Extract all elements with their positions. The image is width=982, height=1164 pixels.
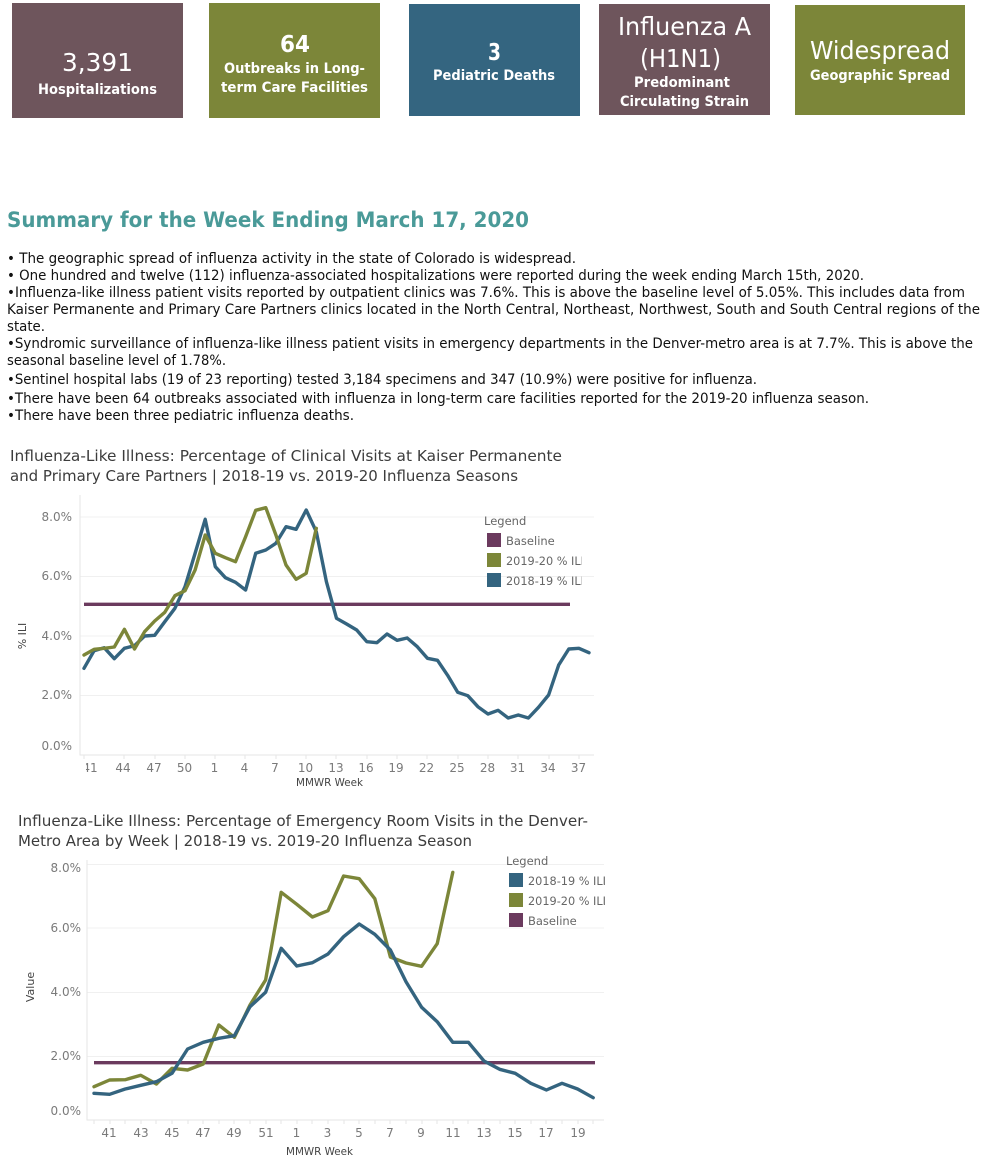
series: baseline: [84, 603, 570, 606]
text block: summary bullets: • The geographic spread of influenza activity in the state of Colorado is widespread.: [7, 251, 576, 267]
x axis labels: 51: [258, 1126, 274, 1140]
y axis labels: 4.0%: [42, 629, 72, 643]
x axis labels: 49: [226, 1126, 242, 1140]
stat card: predominant strain: Circulating Strain: [620, 94, 749, 110]
series: 2018-19: [94, 924, 593, 1098]
y axis labels: 6.0%: [50, 921, 81, 935]
x axis labels: 7: [271, 761, 279, 775]
y axis labels: 8.0%: [42, 510, 72, 524]
stat card: pediatric deaths: [409, 4, 580, 116]
chart title: clinical visits: [10, 447, 562, 485]
x axis labels: 45: [164, 1126, 180, 1140]
chart title: clinical visits: Influenza-Like Illness: Percentage of Clinical Visits at Kaiser Permanente: [10, 447, 562, 465]
series: 2019-20: [84, 508, 316, 655]
chart title: emergency visits: [18, 812, 588, 850]
stat card: outbreaks: term Care Facilities: [221, 80, 368, 96]
x axis labels: 37: [571, 761, 586, 775]
x axis title: MMWR Week: [286, 1145, 354, 1158]
x axis labels: 3: [324, 1126, 331, 1140]
x axis labels: 17: [538, 1126, 554, 1140]
stat card: pediatric deaths: 3: [488, 40, 501, 66]
x axis labels: 1: [293, 1126, 300, 1140]
stat card: hospitalizations: 3,391: [62, 48, 133, 77]
x axis labels: 15: [507, 1126, 523, 1140]
stat card: predominant strain: (H1N1): [640, 44, 721, 73]
stat card: predominant strain: Predominant: [634, 75, 730, 91]
stat card: hospitalizations: Hospitalizations: [38, 82, 157, 98]
x axis labels: 19: [388, 761, 404, 775]
legend: [506, 854, 606, 928]
stat card: predominant strain: [599, 4, 770, 115]
x axis labels: [101, 1126, 586, 1140]
stat card: geographic spread: [795, 5, 965, 115]
chart title: emergency visits: Metro Area by Week | 2018-19 vs. 2019-20 Influenza Season: [18, 832, 472, 850]
x axis labels: 44: [115, 761, 131, 775]
series: baseline: [94, 1061, 595, 1064]
x axis labels: 11: [445, 1126, 461, 1140]
y axis labels: [42, 510, 72, 753]
stat card: outbreaks: Outbreaks in Long-: [224, 61, 365, 77]
text block: summary bullets: state.: [7, 319, 45, 335]
legend: Baseline: [528, 914, 577, 928]
x axis labels: 1: [211, 761, 218, 775]
text block: summary bullets: •Sentinel hospital labs (19 of 23 reporting) tested 3,184 specimens and 347 (10.9%) were positive for influenza.: [7, 372, 757, 388]
stat card: predominant strain: Influenza A: [618, 12, 751, 41]
y axis labels: 8.0%: [50, 861, 81, 875]
legend: Legend: [506, 854, 548, 868]
y axis labels: 4.0%: [50, 985, 81, 999]
y axis title: % ILI: [16, 623, 29, 649]
y axis labels: 2.0%: [50, 1049, 81, 1063]
x axis labels: 28: [480, 761, 495, 775]
stat card: outbreaks: 64: [280, 32, 310, 58]
legend: [484, 514, 584, 588]
x axis title: MMWR Week: [296, 776, 364, 789]
y axis title: Value: [24, 972, 37, 1002]
series: 2018-19: [84, 510, 589, 718]
x axis labels: 13: [476, 1126, 492, 1140]
heading: summary: Summary for the Week Ending March 17, 2020: [7, 208, 529, 233]
legend: Baseline: [506, 534, 555, 548]
line chart: clinical visits: [16, 495, 594, 789]
stat card: outbreaks: [209, 3, 380, 118]
x axis labels: 5: [355, 1126, 363, 1140]
text block: summary bullets: •There have been 64 outbreaks associated with influenza in long-term care facilities reported for the 2019-20 influenza season.: [7, 391, 869, 407]
stat card: hospitalizations: [12, 3, 183, 118]
y axis labels: [50, 861, 81, 1118]
x axis labels: 47: [146, 761, 162, 775]
text block: summary bullets: • One hundred and twelve (112) influenza-associated hospitalizations were reported during the week ending March 15th, 2020.: [7, 268, 864, 284]
line chart: emergency visits: [24, 854, 606, 1158]
series: 2019-20: [94, 872, 453, 1087]
x axis labels: 43: [133, 1126, 149, 1140]
x axis labels: 41: [101, 1126, 117, 1140]
stat card: geographic spread: Geographic Spread: [810, 68, 950, 84]
x axis labels: 16: [358, 761, 374, 775]
y axis labels: 6.0%: [42, 569, 72, 583]
x axis labels: 9: [417, 1126, 425, 1140]
x axis labels: 41: [82, 761, 98, 775]
x axis labels: 31: [510, 761, 525, 775]
legend: 2018-19 % ILI: [528, 874, 606, 888]
x axis labels: 10: [298, 761, 313, 775]
stat card: geographic spread: Widespread: [810, 36, 950, 65]
x axis labels: [86, 763, 586, 772]
x axis labels: 19: [570, 1126, 586, 1140]
legend: 2018-19 % ILI: [506, 574, 584, 588]
chart title: clinical visits: and Primary Care Partners | 2018-19 vs. 2019-20 Influenza Seasons: [10, 467, 518, 485]
text block: summary bullets: •There have been three pediatric influenza deaths.: [7, 408, 354, 424]
y axis labels: 0.0%: [42, 739, 72, 753]
x axis labels: 7: [386, 1126, 394, 1140]
x axis labels: 47: [195, 1126, 211, 1140]
legend: Legend: [484, 514, 526, 528]
text block: summary bullets: [7, 251, 980, 424]
x axis labels: 13: [328, 761, 344, 775]
y axis labels: 2.0%: [42, 688, 72, 702]
x axis labels: 50: [177, 761, 192, 775]
legend: 2019-20 % ILI: [528, 894, 606, 908]
text block: summary bullets: seasonal baseline level of 1.78%.: [7, 353, 226, 369]
x axis labels: 22: [419, 761, 434, 775]
x axis labels: 25: [449, 761, 465, 775]
y axis labels: 0.0%: [50, 1104, 81, 1118]
x axis labels: 4: [241, 761, 248, 775]
stat card: pediatric deaths: Pediatric Deaths: [433, 68, 555, 84]
x axis labels: 34: [540, 761, 556, 775]
legend: 2019-20 % ILI: [506, 554, 584, 568]
chart title: emergency visits: Influenza-Like Illness: Percentage of Emergency Room Visits in the Denver-: [18, 812, 588, 830]
